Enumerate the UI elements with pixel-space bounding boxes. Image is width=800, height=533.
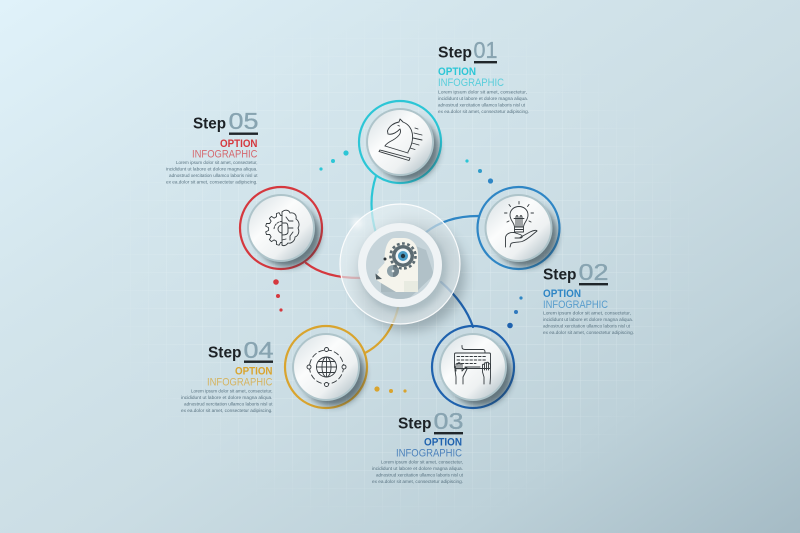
step 1 node: chess knight xyxy=(359,101,441,183)
text: step 4: OPTION xyxy=(235,366,273,378)
text: step 2: Step xyxy=(543,266,577,284)
text: step 4: 04 xyxy=(244,337,274,363)
text: step 1 xyxy=(438,37,529,114)
step 2 node: idea bulb in hand xyxy=(478,187,560,269)
text: step 2: Lorem ipsum dolor sit amet, consectetur, xyxy=(543,310,631,316)
text: step 4: adnostrud xercitation ullamco laboris nisl ut xyxy=(184,402,273,406)
text: step 1: INFOGRAPHIC xyxy=(438,77,504,89)
icon: head with gears xyxy=(375,238,433,299)
icon: bulb and hand xyxy=(504,202,537,247)
icon: brain and gear xyxy=(266,210,299,246)
text: step 3: Step xyxy=(398,416,432,432)
text: step 2: OPTION xyxy=(543,288,581,300)
text: step 3 xyxy=(372,408,464,484)
text: step 1: Step xyxy=(438,44,472,62)
text: step 2: incididunt ut labore et dolore magna aliqua. xyxy=(543,317,633,322)
text: step 2: 02 xyxy=(578,259,608,285)
text: step 5: ex ea.dolor sit amet, consectetur adipiscing. xyxy=(166,180,258,184)
text: step 1: OPTION xyxy=(438,66,476,78)
dots between steps xyxy=(273,150,523,393)
text: step 5: 05 xyxy=(228,108,258,134)
text: step 3: Lorem ipsum dolor sit amet, consectetur, xyxy=(381,460,463,464)
text: step 3: OPTION xyxy=(424,436,462,448)
text: step 5 xyxy=(166,108,258,184)
step 3 node: keyboard and hands xyxy=(432,326,514,408)
step 5 node: brain and gear xyxy=(240,187,322,269)
text: step 1: incididunt ut labore et dolore magna aliqua. xyxy=(438,96,528,101)
text: step 2: adnostrud xercitation ullamco laboris nisl ut xyxy=(543,324,631,328)
text: step 5: adnostrud xercitation ullamco laboris nisl ut xyxy=(169,173,258,178)
text: step 4: INFOGRAPHIC xyxy=(207,376,273,388)
text: step 1: Lorem ipsum dolor sit amet, consectetur, xyxy=(438,90,527,94)
text: step 3: ex ea.dolor sit amet, consectetur adipiscing. xyxy=(372,479,463,484)
text: step 2: ex ea.dolor sit amet, consectetur adipiscing. xyxy=(543,330,634,335)
text: step 2: INFOGRAPHIC xyxy=(543,299,608,311)
text: step 3: INFOGRAPHIC xyxy=(396,448,462,460)
text: step 4: Lorem ipsum dolor sit amet, consectetur, xyxy=(191,388,272,394)
text: step 3: 03 xyxy=(434,408,464,434)
central glass hub xyxy=(340,204,465,331)
text: step 5: Step xyxy=(193,116,226,132)
icon: globe xyxy=(307,348,346,386)
text: step 1: 01 xyxy=(474,37,498,63)
text: step 5: INFOGRAPHIC xyxy=(192,148,258,160)
step 4 node: globe xyxy=(285,326,367,408)
icon: keyboard xyxy=(454,346,490,384)
text: step 3: adnostrud xercitation ullamco laboris nisl ut xyxy=(376,472,464,478)
connector lines xyxy=(306,176,478,353)
text: step 2 xyxy=(543,259,634,335)
text: step 4: incididunt ut labore et dolore magna aliqua. xyxy=(181,395,272,400)
text: step 5: OPTION xyxy=(220,138,258,150)
text: step 1: adnostrud xercitation ullamco laboris nisl ut xyxy=(438,102,526,108)
text: step 4: ex ea.dolor sit amet, consectetur adipiscing. xyxy=(181,408,272,413)
icon: chess knight xyxy=(379,119,422,160)
text: step 1: ex ea.dolor sit amet, consectetur adipiscing. xyxy=(438,109,529,114)
text: step 5: Lorem ipsum dolor sit amet, consectetur, xyxy=(176,160,258,165)
text: step 3: incididunt ut labore et dolore magna aliqua. xyxy=(372,466,463,471)
text: step 4: Step xyxy=(208,344,242,362)
text: step 4 xyxy=(181,337,274,413)
text: step 5: incididunt ut labore et dolore magna aliqua. xyxy=(166,166,258,172)
